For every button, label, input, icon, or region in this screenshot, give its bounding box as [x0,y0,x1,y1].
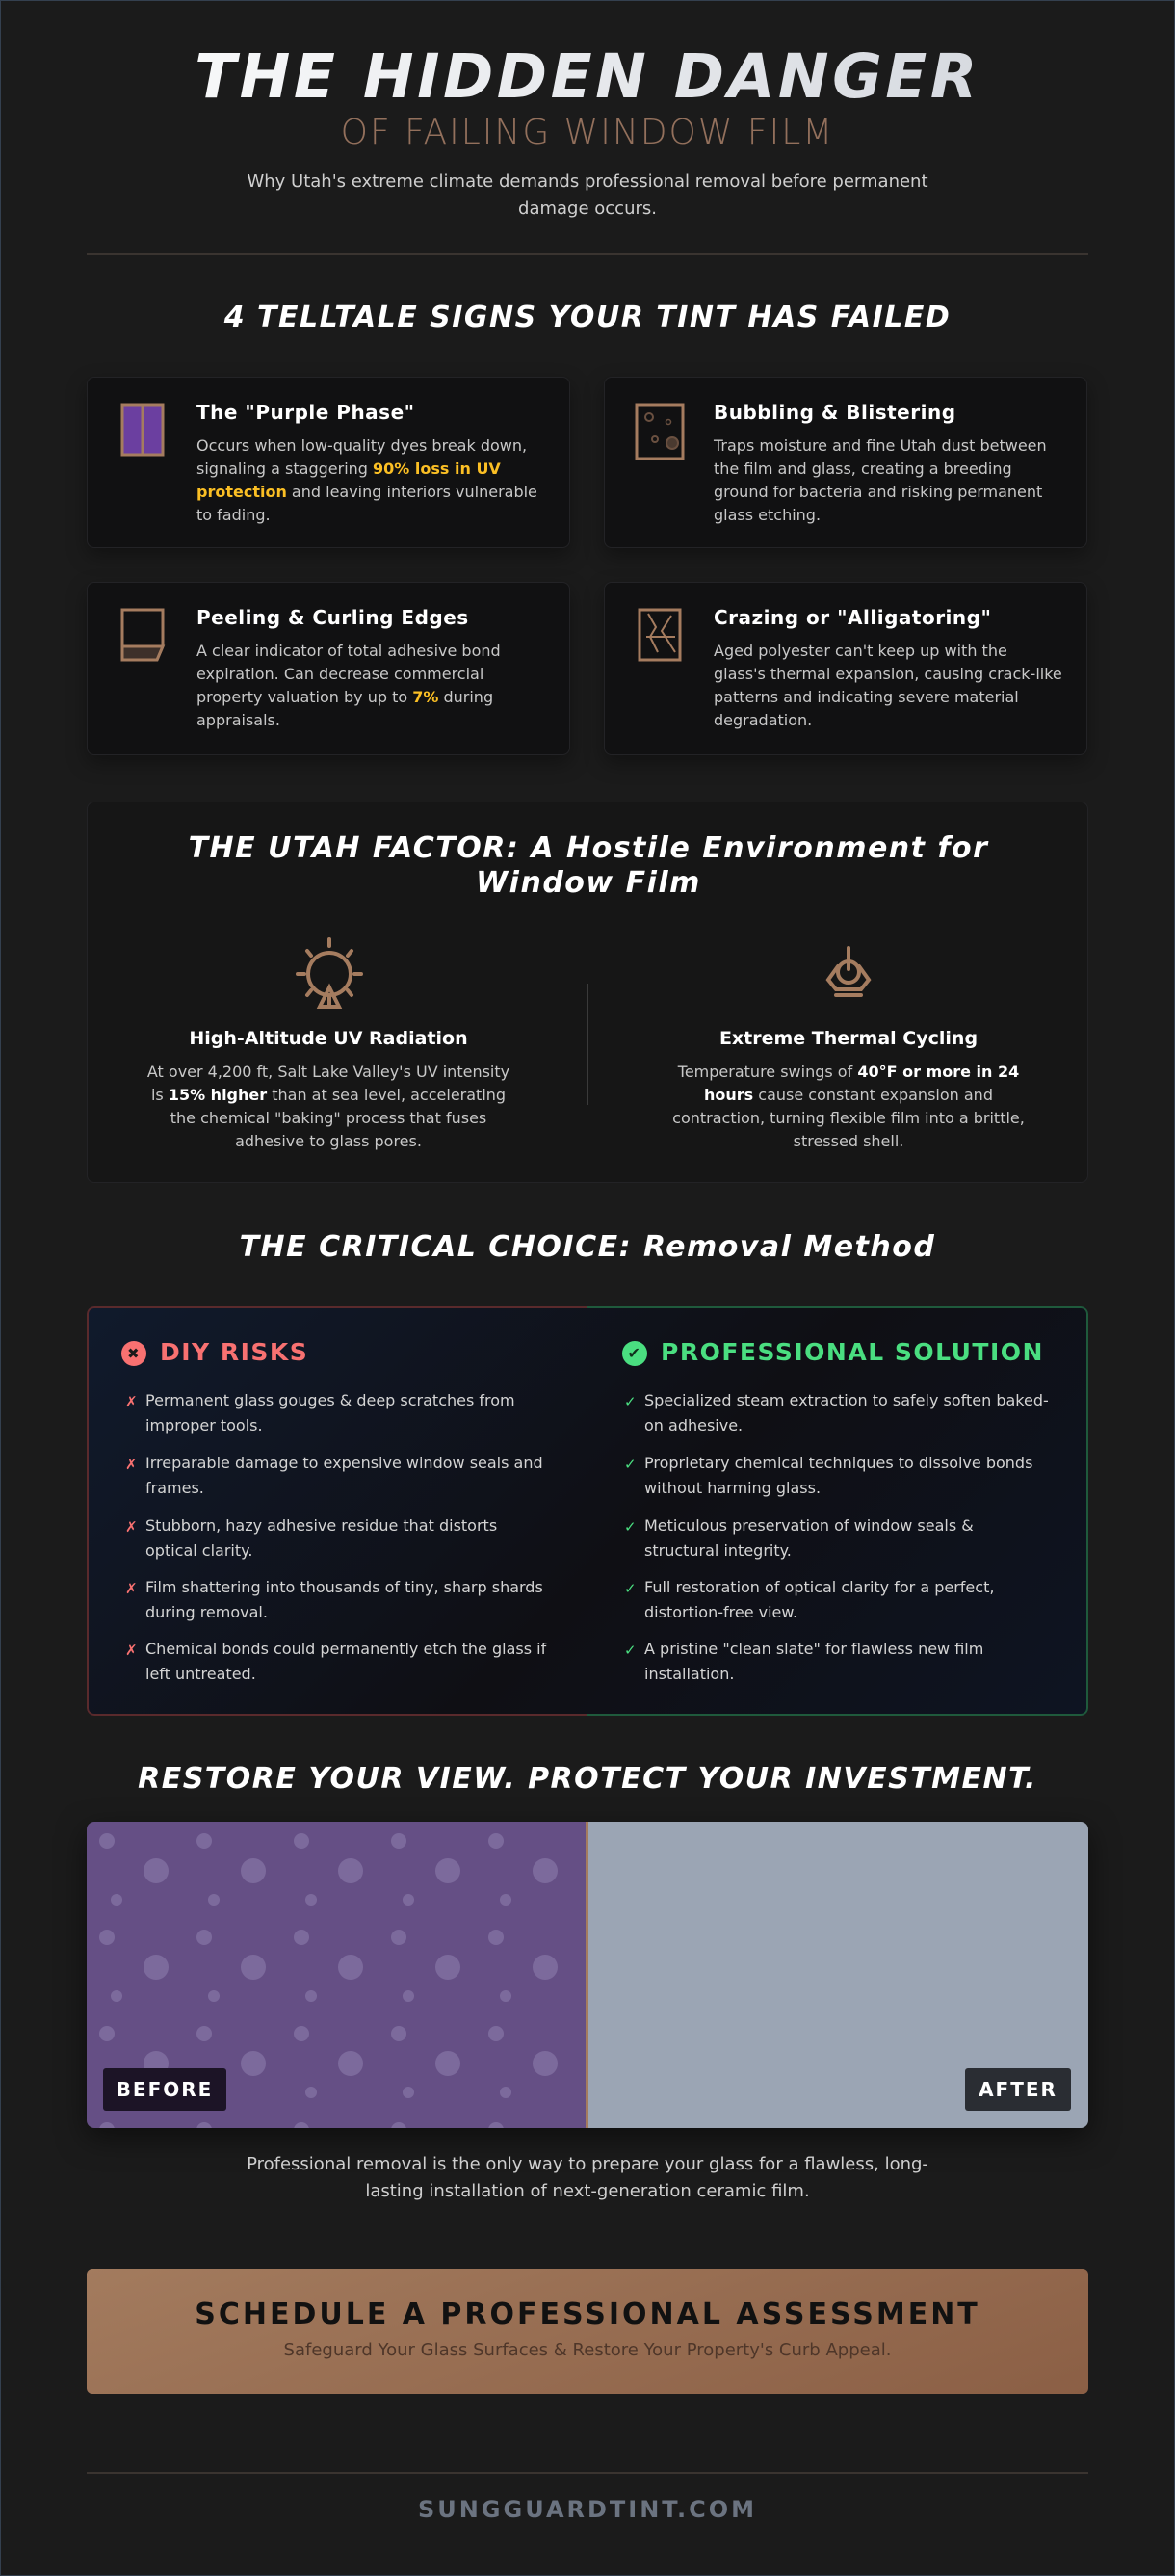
column: UV radiation [147,937,509,1150]
column: professional solution: ✓ [624,1456,637,1473]
card: peeling: A clear indicator of total adhesive bond expiration. Can decrease commercial property valuation by up to 7% during appraisals. [196,642,501,729]
column: professional solution: A pristine "clean slate" for flawless new film installation. [644,1640,983,1683]
column: DIY risks: Irreparable damage to expensive window seals and frames. [145,1454,543,1497]
CTA subtext: Safeguard Your Glass Surfaces & Restore Your Property's Curb Appeal. [284,2340,891,2360]
column: DIY risks: ✗ [125,1580,138,1597]
card: bubbling: Bubbling & Blistering [714,401,956,424]
column: DIY risks: ✗ [125,1456,138,1473]
caption: Professional removal is the only way to prepare your glass for a flawless, long-lasting installation of next-generation ceramic film. [247,2154,928,2201]
column: professional solution: ✓ [624,1580,637,1597]
label: after: AFTER [979,2078,1058,2101]
icon: cracked glass [638,609,682,661]
footer: website: SUNGGUARDTINT.COM [418,2496,757,2523]
icon: sun [296,937,363,1009]
card: bubbling [604,377,1087,548]
card: crazing: Crazing or "Alligatoring" [714,606,991,629]
title [0,39,1175,116]
column: DIY risks: Film shattering into thousands of tiny, sharp shards during removal. [145,1578,543,1621]
column: professional solution: ✓ [624,1518,637,1536]
title: UV: High-Altitude UV Radiation [189,1028,468,1049]
column: DIY risks: Chemical bonds could permanently etch the glass if left untreated. [145,1640,546,1683]
heading: DIY risks: ✖ [127,1345,141,1362]
CTA heading: SCHEDULE A PROFESSIONAL ASSESSMENT [195,2298,980,2331]
card: purple phase: The "Purple Phase" [196,401,415,424]
heading: restore: RESTORE YOUR VIEW. PROTECT YOUR INVESTMENT. [138,1762,1037,1796]
panel: Utah factor [87,802,1088,1183]
column: DIY risks: Stubborn, hazy adhesive residue that distorts optical clarity. [145,1516,497,1560]
text: UV: At over 4,200 ft, Salt Lake Valley's UV intensity is 15% higher than at sea level, accelerating the chemical "baking" process that fuses adhesive to glass pores. [147,1063,509,1150]
heading: critical choice: THE CRITICAL CHOICE: Removal Method [240,1230,935,1264]
column: professional solution: Meticulous preservation of window seals & structural integrity. [644,1516,974,1560]
column: DIY risks: ✗ [125,1393,138,1410]
card: peeling [87,582,570,755]
column: DIY risks: ✗ [125,1642,138,1659]
CTA banner [87,2269,1088,2394]
panel: comparison [87,1306,1088,1716]
column: professional solution: ✓ [624,1393,637,1410]
card: crazing: Aged polyester can't keep up with the glass's thermal expansion, causing crack-like patterns and indicating severe material degradation. [714,642,1062,729]
card: purple phase [87,377,570,548]
heading: professional: ✔ [628,1344,641,1362]
icon: peeling [121,609,166,661]
intro text: Why Utah's extreme climate demands professional removal before permanent damage occurs. [247,171,928,219]
card: crazing [604,582,1087,755]
icon: thermometer [826,946,871,997]
card: peeling: Peeling & Curling Edges [196,606,469,629]
title: THE HIDDEN DANGER [195,41,980,112]
column: professional solution: Full restoration of optical clarity for a perfect, distortion-free view. [644,1578,994,1621]
column: thermal cycling [672,946,1025,1150]
heading: 4 telltale signs: 4 TELLTALE SIGNS YOUR TINT HAS FAILED [224,301,951,334]
label: before [103,2068,226,2111]
text: thermal: Temperature swings of 40°F or more in 24 hours cause constant expansion and contraction, turning flexible film into a brittle, stressed shell. [672,1063,1025,1150]
card: purple phase: Occurs when low-quality dyes break down, signaling a staggering 90% loss in UV protection and leaving interiors vulnerable to fading. [196,436,537,524]
heading: professional: PROFESSIONAL SOLUTION [661,1338,1044,1366]
before panel [87,1822,586,2128]
column: professional solution: ✓ [624,1642,637,1659]
label: before: BEFORE [117,2078,213,2101]
column: DIY risks: Permanent glass gouges & deep scratches from improper tools. [145,1391,515,1434]
before/after comparison image [87,1822,1088,2128]
column: professional solution [622,1338,1049,1683]
heading: DIY risks: DIY RISKS [160,1338,308,1366]
column: DIY risks: ✗ [125,1518,138,1536]
column: professional solution: Proprietary chemical techniques to dissolve bonds without harming glass. [644,1454,1032,1497]
card: bubbling: Traps moisture and fine Utah dust between the film and glass, creating a breeding ground for bacteria and risking permanent glass etching. [714,436,1047,524]
heading: utah factor: THE UTAH FACTOR: A Hostile Environment for Window Film [189,831,988,900]
label: after [965,2068,1071,2111]
icon: purple window [121,403,164,457]
after panel [588,1822,1088,2128]
title: thermal: Extreme Thermal Cycling [719,1028,978,1049]
icon: bubbles [636,403,684,460]
column: DIY risks [121,1338,547,1683]
subtitle: OF FAILING WINDOW FILM [341,113,834,152]
column: professional solution: Specialized steam extraction to safely soften baked-on adhesive. [644,1391,1049,1434]
